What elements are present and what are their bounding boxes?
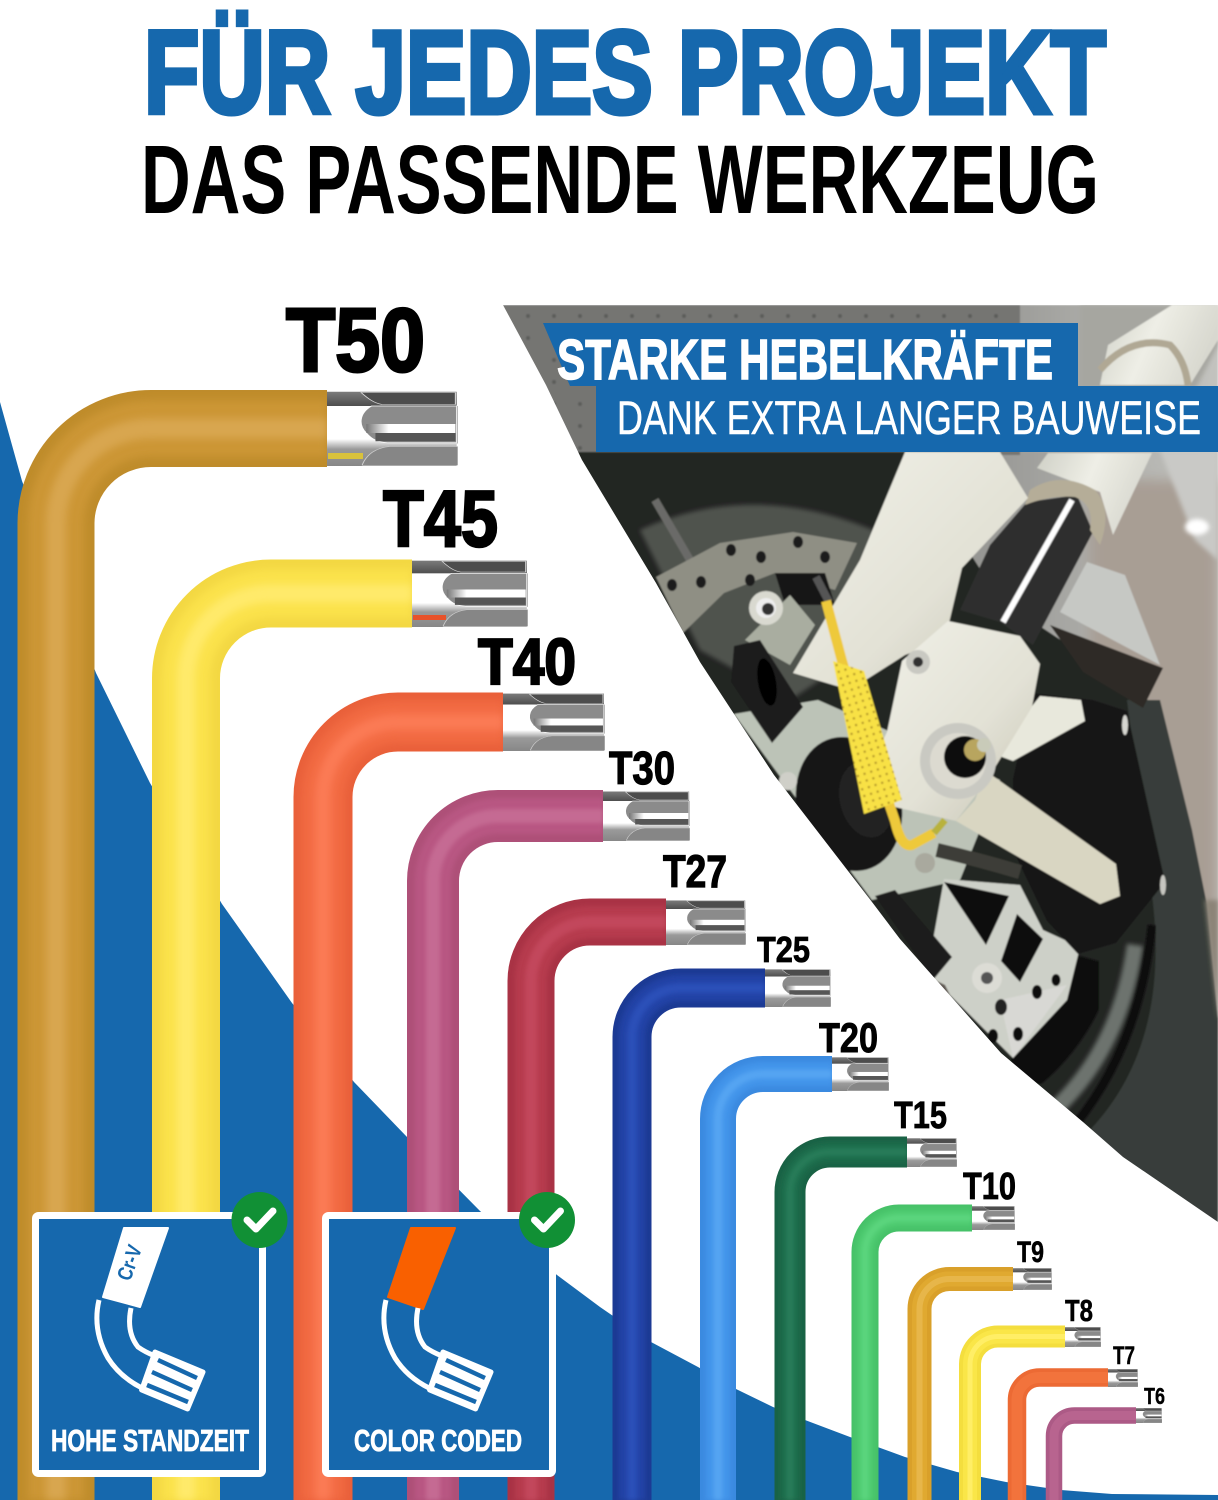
label T9: T9: [1017, 1236, 1044, 1269]
upper fork tube: [1037, 305, 1218, 535]
caliper: [1013, 693, 1166, 954]
icon label Cr-V: Cr-V: [113, 1242, 147, 1284]
key T25: [632, 929, 831, 1500]
background blue swoosh: [0, 402, 1218, 1500]
black slots: [731, 640, 803, 743]
wheel and tyre: [578, 451, 1218, 1222]
upper brake disc: [656, 532, 857, 665]
key T27: [531, 846, 746, 1500]
tip T6: [1136, 1408, 1162, 1423]
label T27: T27: [663, 846, 727, 897]
banner heading: STARKE HEBELKRÄFTE: [557, 328, 1053, 392]
key T10: [865, 1166, 1016, 1500]
shaft T8: [970, 1336, 1065, 1500]
key T8: [970, 1293, 1101, 1500]
label T25: T25: [757, 929, 810, 970]
tip T15: [907, 1138, 957, 1167]
label T45: T45: [383, 474, 498, 563]
tip T25: [765, 969, 831, 1007]
colour reflection: [328, 453, 363, 459]
card caption: COLOR CODED: [354, 1423, 522, 1458]
hub: [778, 736, 935, 874]
shaft T20: [718, 1074, 832, 1500]
colour reflection: [413, 615, 446, 620]
tip T50: [327, 392, 458, 466]
tip T45: [412, 561, 528, 627]
lower mounting plate: [734, 700, 1000, 900]
shaft T30: [433, 816, 603, 1500]
shaft T9: [920, 1279, 1013, 1500]
card caption: HOHE STANDZEIT: [51, 1423, 249, 1458]
label T6: T6: [1144, 1383, 1165, 1409]
shaft T50: [56, 428, 327, 1500]
label T10: T10: [963, 1166, 1016, 1208]
black fork tube: [960, 480, 1105, 645]
axle casting: [864, 621, 1120, 904]
yellow key in photo: [816, 577, 945, 845]
photo painting: [500, 305, 1218, 1300]
shaft T40: [323, 722, 503, 1500]
shaft T15: [790, 1152, 907, 1500]
tip T30: [603, 792, 690, 841]
tip T20: [832, 1057, 889, 1091]
label T15: T15: [894, 1095, 947, 1137]
key T7: [1017, 1342, 1138, 1500]
tip T40: [503, 694, 605, 751]
shaft T6: [1054, 1416, 1136, 1500]
key T6: [1054, 1383, 1165, 1500]
shaft T10: [865, 1218, 972, 1500]
key T9: [920, 1236, 1052, 1500]
icon: bent key orange: [384, 1228, 491, 1409]
badge: check mark: [232, 1192, 288, 1248]
label T20: T20: [819, 1014, 878, 1061]
key T45: [186, 474, 528, 1500]
fender: [1050, 562, 1163, 708]
tip T8: [1065, 1327, 1101, 1347]
panel: motorcycle photo: [500, 305, 1218, 1300]
label T40: T40: [478, 625, 576, 698]
shaft T45: [186, 594, 412, 1500]
shaft T27: [531, 922, 666, 1500]
icon: bent key Cr-V: [97, 1228, 203, 1409]
key T40: [323, 625, 605, 1500]
key T20: [718, 1014, 889, 1500]
photo background: [503, 305, 1218, 1034]
panel: feature card Hohe Standzeit: [36, 1192, 288, 1474]
card background: [36, 1216, 262, 1474]
tip T9: [1013, 1268, 1052, 1290]
shaft T25: [632, 988, 765, 1500]
white fender bracket: [793, 452, 1028, 690]
tip T10: [972, 1206, 1015, 1230]
panel: feature card Color Coded: [326, 1192, 575, 1474]
key T50: [56, 291, 458, 1500]
card background: [326, 1216, 552, 1474]
shaft T7: [1017, 1378, 1108, 1500]
key T30: [433, 742, 690, 1500]
label T30: T30: [609, 742, 675, 794]
tip T27: [666, 900, 746, 945]
label T8: T8: [1065, 1293, 1093, 1328]
label T50: T50: [286, 291, 425, 391]
banner background: [543, 323, 1218, 452]
lower brake disc: [875, 879, 1080, 1058]
key T15: [790, 1095, 957, 1500]
label T7: T7: [1113, 1342, 1135, 1370]
tip T7: [1108, 1369, 1138, 1387]
badge: check mark: [519, 1192, 575, 1248]
callout banner: [543, 323, 1218, 452]
